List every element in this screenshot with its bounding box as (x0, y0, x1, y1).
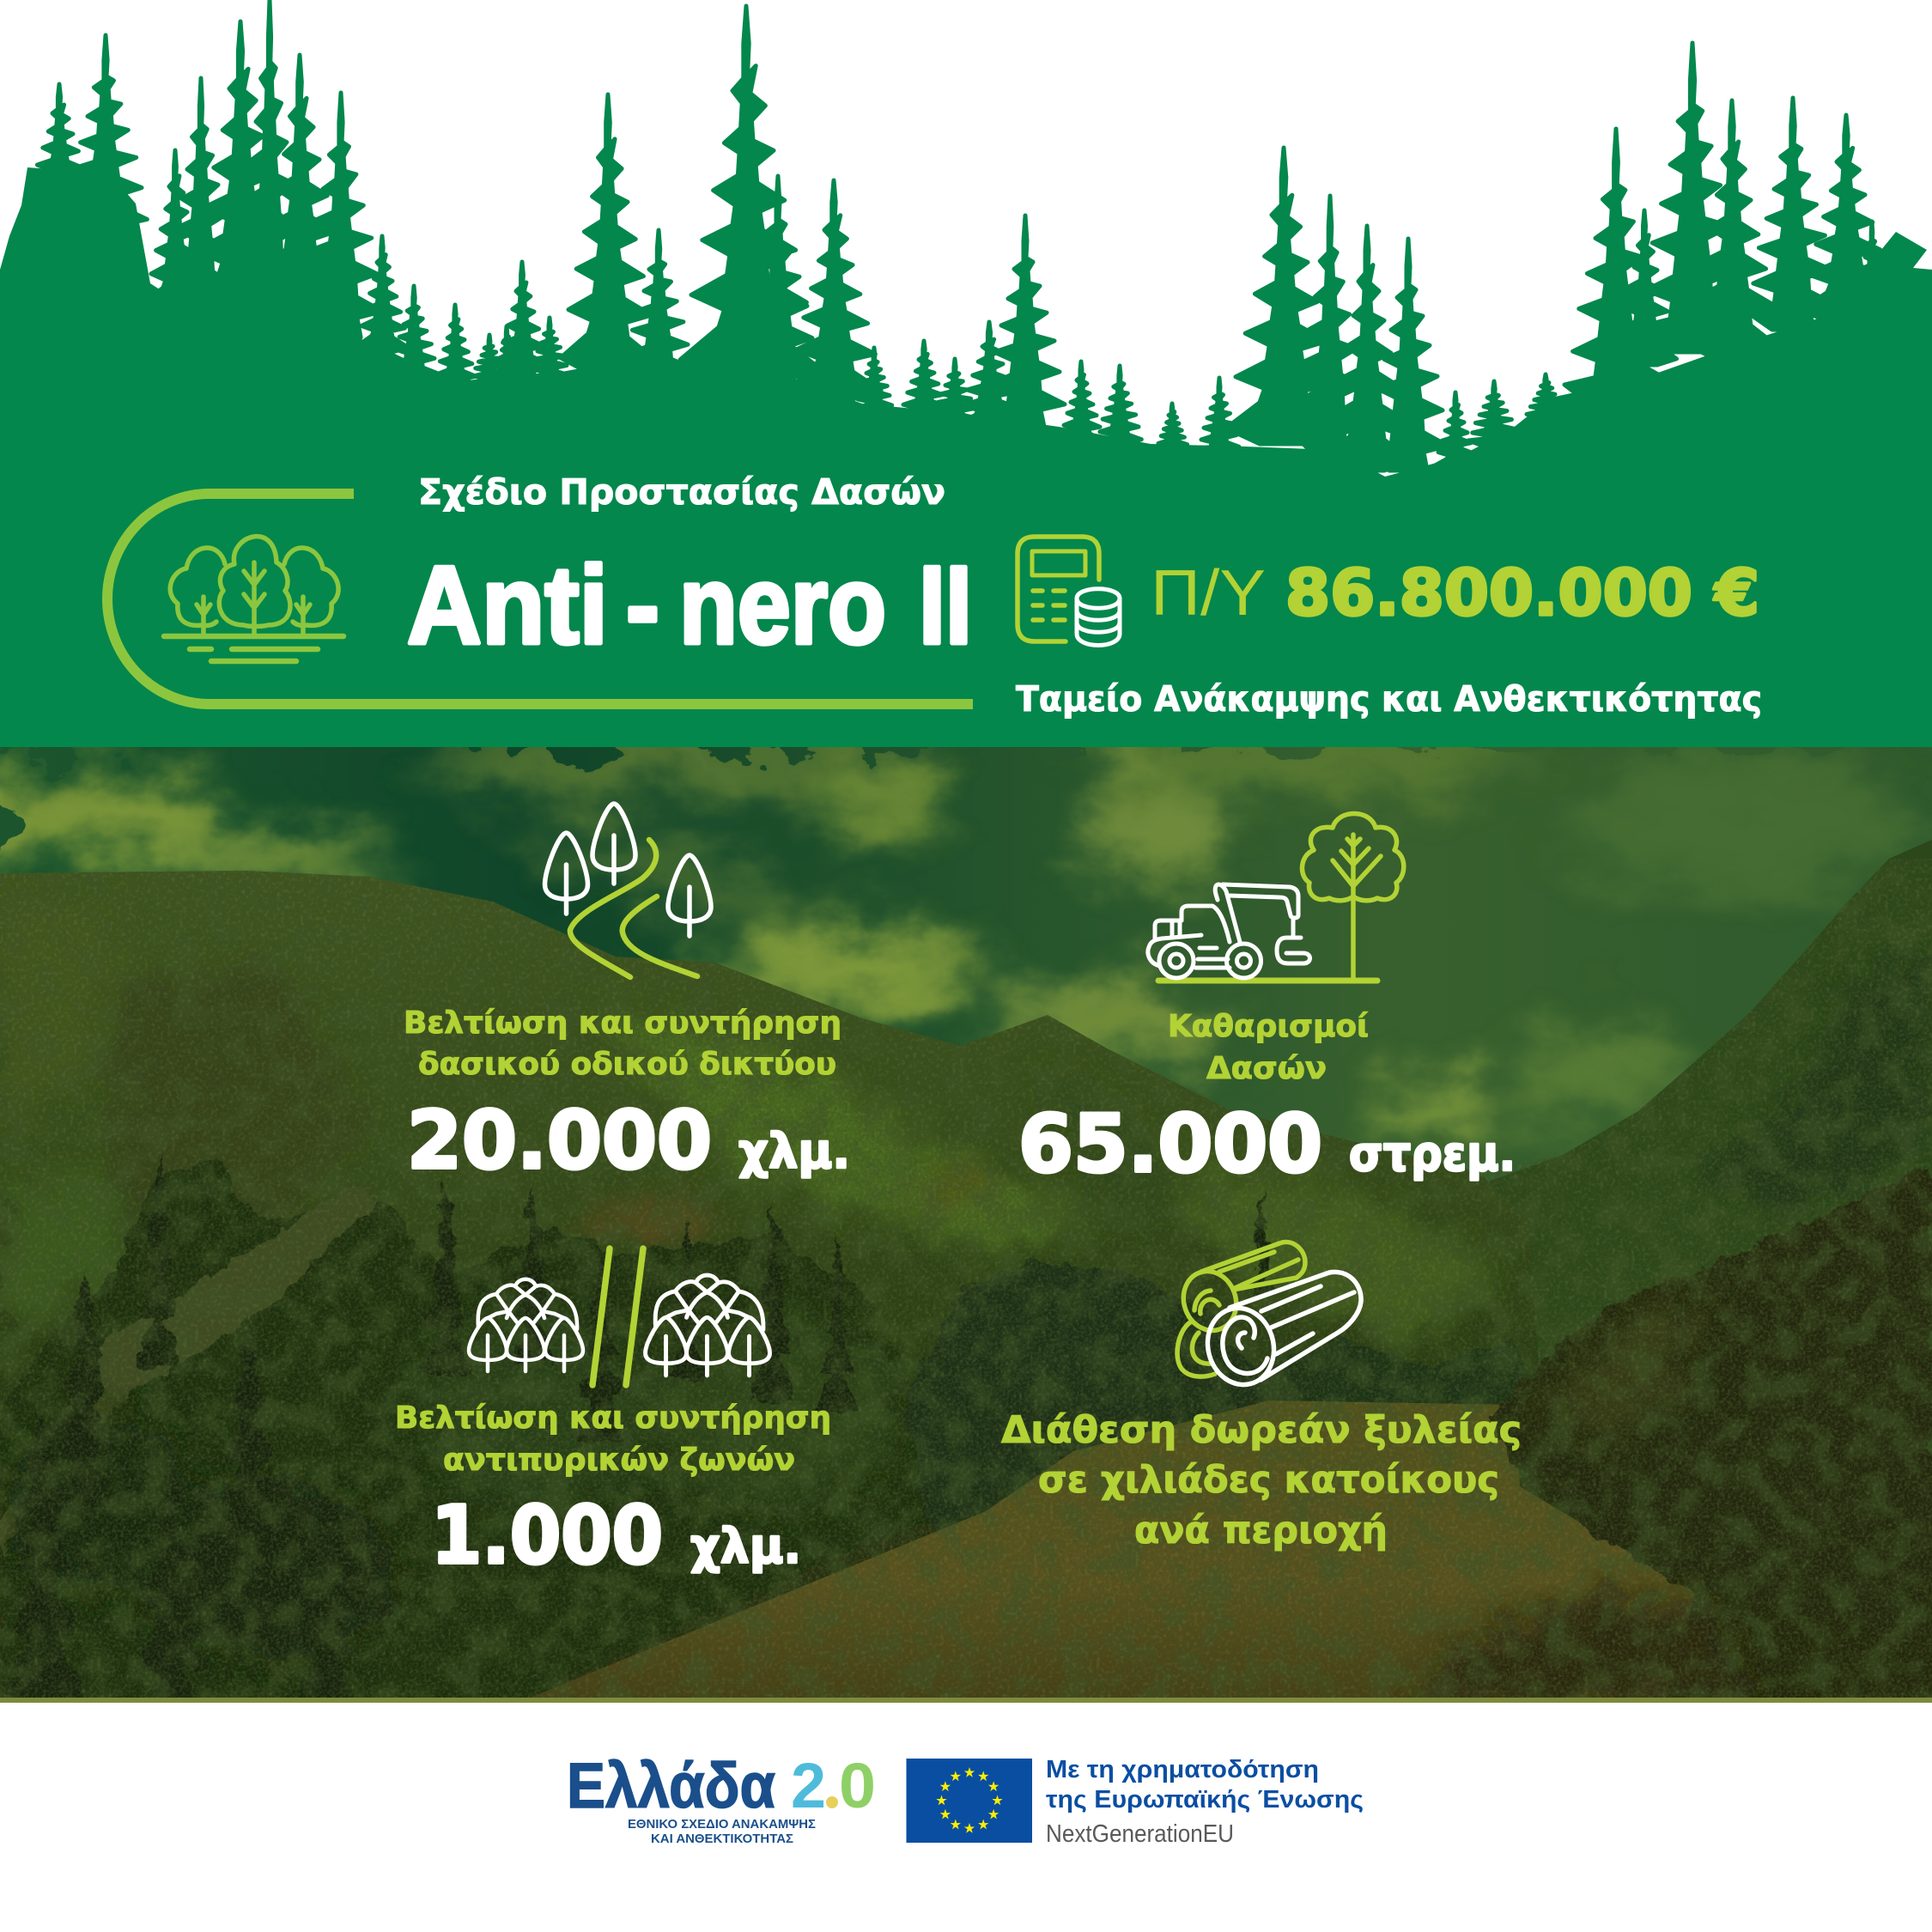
unit: στρεμ. (1349, 1127, 1516, 1182)
grass highlights (1541, 1288, 1700, 1443)
funding line 2: της Ευρωπαϊκής Ένωσης (1046, 1786, 1364, 1814)
unit: χλμ. (690, 1519, 801, 1575)
fund name: Ταμείο Ανάκαμψης και Ανθεκτικότητας (1016, 678, 1762, 720)
ground mass under trees (0, 167, 1932, 756)
label: Βελτίωση και συντήρηση (404, 1005, 841, 1041)
budget label: Π/Υ (1151, 556, 1266, 629)
icon: calculator with coins (1018, 537, 1120, 646)
value: 1.000 (431, 1489, 663, 1582)
right mountain (1460, 840, 1932, 1477)
main title: Anti (407, 544, 608, 667)
icon: firebreak between tree stands (469, 1249, 770, 1385)
value: 20.000 (407, 1094, 712, 1187)
label line 2: Δασών (1206, 1051, 1327, 1086)
icon: logs (1176, 1242, 1361, 1392)
EU flag (907, 1759, 1032, 1843)
wordmark: Ελλάδα (567, 1750, 775, 1821)
label: Βελτίωση και συντήρηση (395, 1400, 831, 1436)
centre tree cluster (561, 6, 1239, 455)
main title (407, 544, 972, 667)
label line 2: σε χιλιάδες κατοίκους (1038, 1458, 1499, 1502)
logo: Ellada 2.0 (567, 1750, 876, 1846)
tagline 1: ΕΘΝΙΚΟ ΣΧΕΔΙΟ ΑΝΑΚΑΜΨΗΣ (628, 1817, 816, 1832)
main title: - (626, 544, 659, 667)
left dark forest (0, 1159, 962, 1703)
budget value: 86.800.000 € (1285, 556, 1759, 630)
texture overlays (0, 859, 1932, 1704)
background photo: mountain road under green tint (0, 722, 1932, 1736)
EU funding text (1046, 1756, 1364, 1848)
forest silhouette header (0, 0, 1932, 756)
unit: χλμ. (738, 1124, 850, 1180)
label: Καθαρισμοί (1168, 1009, 1369, 1044)
label line 1: Διάθεση δωρεάν ξυλείας (1001, 1408, 1522, 1452)
slope shading (0, 967, 1498, 1351)
main title: nero (679, 544, 886, 667)
version dot (826, 1796, 838, 1808)
forest tone patches (9, 1305, 902, 1657)
right tree clusters (1226, 43, 1893, 471)
pale rocky ridge (0, 1185, 378, 1554)
road shadows (1666, 1595, 1932, 1703)
header subtitle: Σχέδιο Προστασίας Δασών (418, 471, 945, 513)
item: forest clearing (1018, 814, 1516, 1190)
central bushes (902, 1262, 1271, 1546)
main mountain ridge (0, 871, 1539, 1403)
label line 2: αντιπυρικών ζωνών (443, 1443, 795, 1478)
road (518, 1400, 1932, 1703)
clouds (0, 722, 1898, 1143)
olive strip under photo (0, 1698, 1932, 1703)
tagline 2: ΚΑΙ ΑΝΘΕΚΤΙΚΟΤΗΤΑΣ (651, 1832, 793, 1846)
item: road network (404, 804, 850, 1187)
item: firebreaks (395, 1249, 831, 1582)
icon: excavator and tree (1148, 814, 1404, 981)
item: free firewood (1001, 1242, 1522, 1552)
conifer trees (0, 1151, 1273, 1736)
icon: trees on ground (164, 537, 343, 661)
main title: II (919, 544, 972, 667)
funding line 1: Με τη χρηματοδότηση (1046, 1756, 1319, 1783)
left tree cluster (27, 0, 569, 395)
valley shrubs (1262, 1340, 1546, 1408)
version 0: 0 (839, 1750, 876, 1821)
sky (0, 747, 1932, 1182)
photo base (0, 1460, 1932, 1698)
right foreground grass bank (1490, 1166, 1932, 1649)
label line 3: ανά περιοχή (1134, 1509, 1388, 1552)
funding line 3: NextGenerationEU (1046, 1820, 1234, 1848)
icon: trees and winding roads (544, 804, 711, 977)
version 2: 2 (791, 1750, 826, 1821)
label line 2: δασικού οδικού δικτύου (418, 1047, 836, 1082)
road shadow band (1417, 1595, 1760, 1703)
header bracket line (107, 494, 973, 704)
right mountain shade (1700, 945, 1932, 1219)
value: 65.000 (1018, 1097, 1322, 1190)
